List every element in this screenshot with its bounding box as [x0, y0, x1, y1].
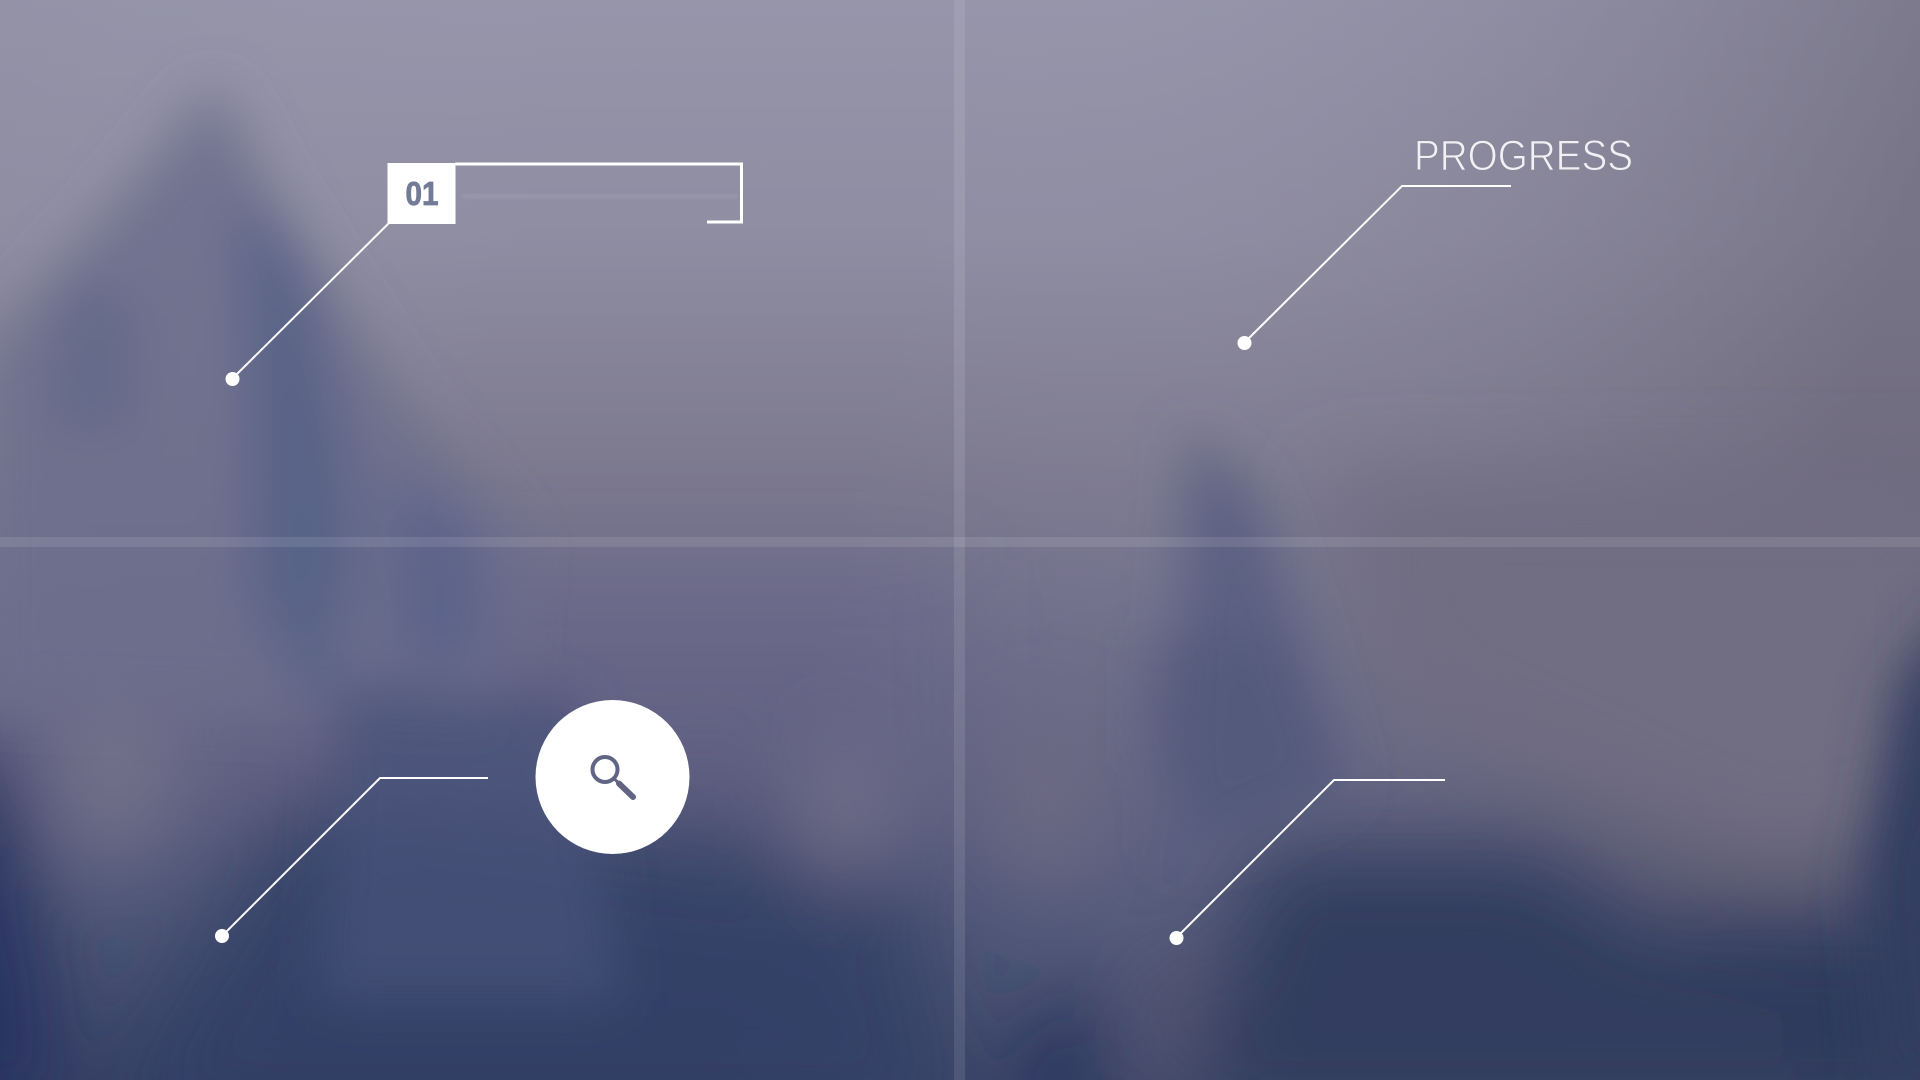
- leader dot: [226, 372, 240, 386]
- leader line: [1244, 186, 1511, 343]
- number box: [388, 163, 456, 224]
- panel: number label 01: [226, 163, 742, 386]
- leader line: [222, 778, 488, 936]
- panel: empty callout: [1170, 780, 1445, 945]
- leader dot: [1238, 336, 1252, 350]
- panel: progress heading: [1238, 132, 1633, 350]
- panel divider: horizontal band: [0, 537, 1920, 547]
- leader dot: [215, 929, 229, 943]
- white circle: [536, 700, 690, 854]
- leader line to number box: [232, 223, 389, 379]
- heading text: PROGRESS: [1414, 132, 1633, 180]
- leader line: [1176, 780, 1445, 938]
- number: 01: [406, 175, 438, 212]
- leader dot: [1170, 931, 1184, 945]
- faint placeholder bar: [462, 194, 737, 199]
- icon: magnifying glass: [592, 757, 633, 797]
- panel divider: vertical band: [954, 0, 965, 1080]
- panel: search icon callout: [215, 700, 690, 943]
- bracket outline: [455, 164, 742, 222]
